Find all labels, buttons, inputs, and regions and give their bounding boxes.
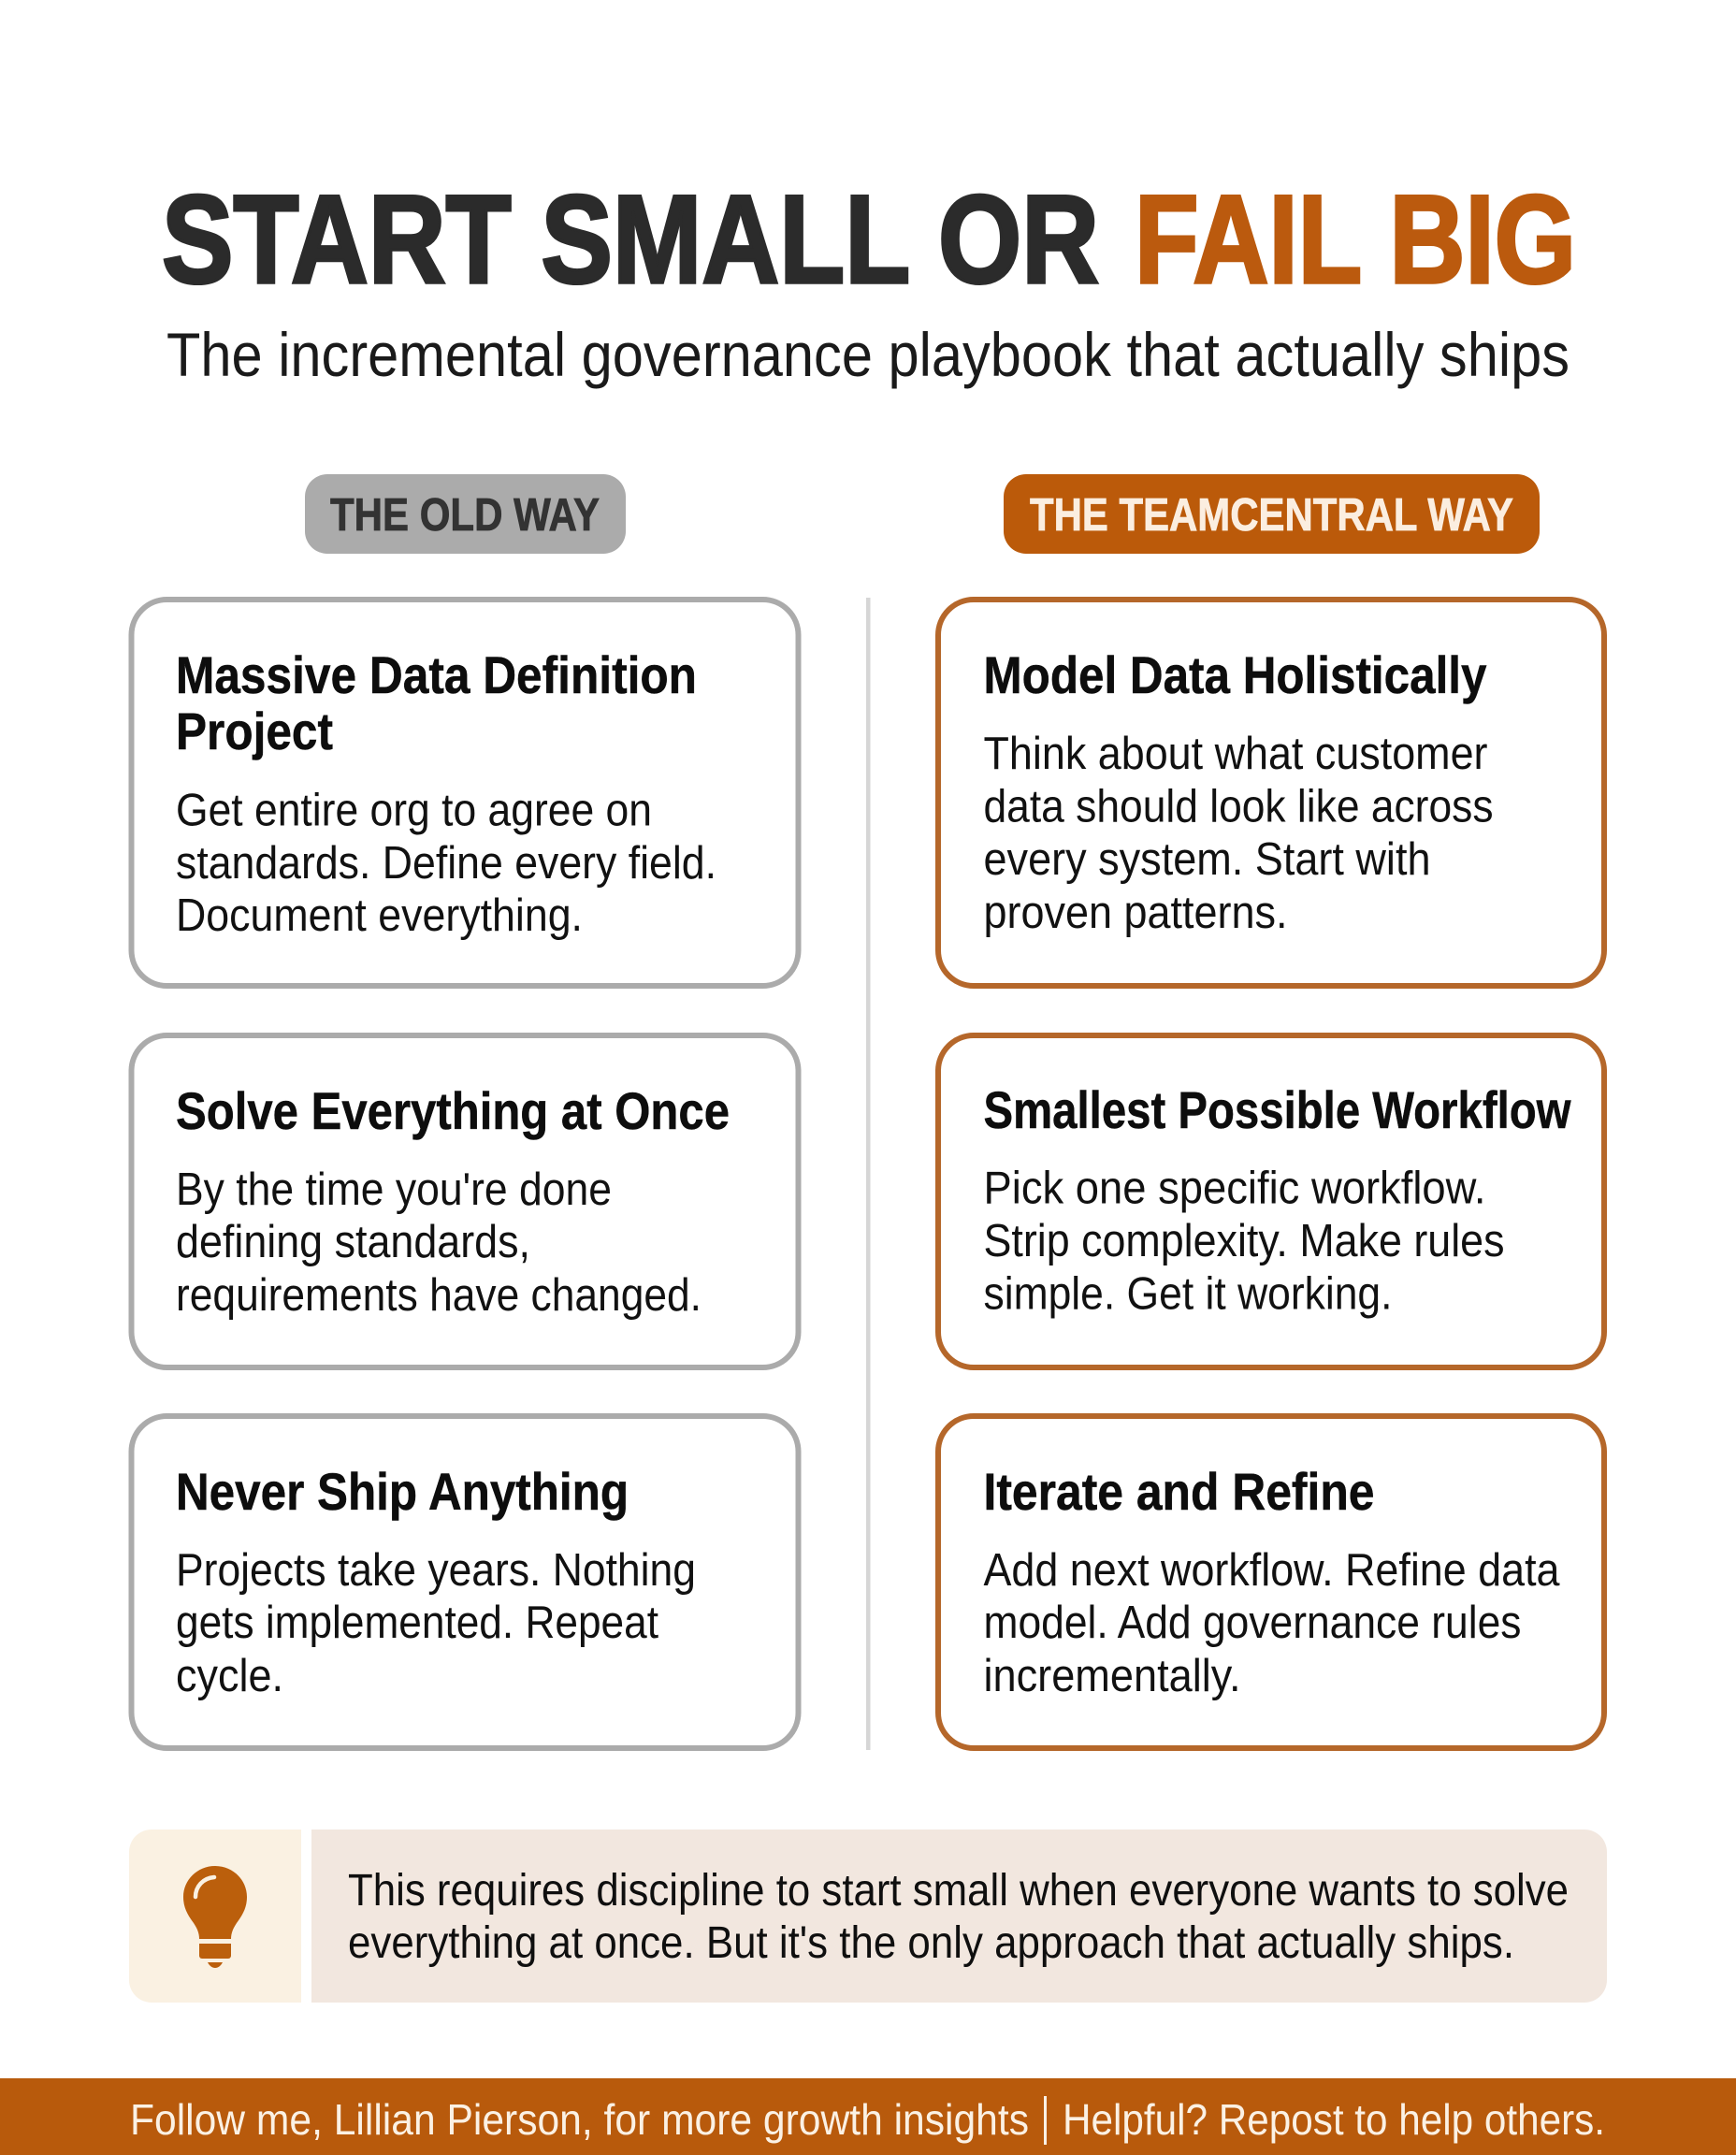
- card body: requirements have changed.: [176, 1270, 702, 1321]
- callout: [129, 1830, 1607, 2003]
- card heading: Massive Data Definition: [176, 645, 697, 704]
- callout text: This requires discipline to start small when everyone wants to solve: [348, 1866, 1569, 1916]
- card body: Get entire org to agree on: [176, 786, 652, 836]
- card body: cycle.: [176, 1651, 283, 1701]
- card heading: Never Ship Anything: [176, 1462, 629, 1521]
- footer banner: [0, 2078, 1736, 2155]
- card heading: Iterate and Refine: [984, 1462, 1375, 1521]
- card body: Document everything.: [176, 890, 583, 941]
- card body: [984, 729, 1493, 938]
- card body: every system. Start with: [984, 834, 1431, 885]
- callout text: [348, 1866, 1569, 1968]
- title: FAIL BIG: [1135, 170, 1576, 310]
- card heading: Project: [176, 701, 333, 760]
- card body: [984, 1545, 1560, 1701]
- card body: defining standards,: [176, 1217, 530, 1267]
- title: START SMALL OR: [162, 170, 1099, 310]
- subtitle: The incremental governance playbook that actually ships: [166, 320, 1570, 389]
- card body: incrementally.: [984, 1651, 1240, 1701]
- card body: Strip complexity. Make rules: [984, 1216, 1504, 1266]
- card body: By the time you're done: [176, 1164, 612, 1215]
- card body: [176, 1545, 696, 1701]
- card body: Add next workflow. Refine data: [984, 1545, 1560, 1596]
- card body: [176, 1164, 702, 1321]
- panel: never ship anything: [131, 1416, 799, 1748]
- card body: gets implemented. Repeat: [176, 1598, 658, 1648]
- badge: the old way: [305, 474, 626, 554]
- card body: Think about what customer: [984, 729, 1487, 779]
- card body: [984, 1164, 1504, 1319]
- icon: light bulb: [183, 1866, 247, 1968]
- card heading: Smallest Possible Workflow: [984, 1080, 1571, 1139]
- card body: proven patterns.: [984, 888, 1287, 938]
- panel: model data holistically: [938, 600, 1604, 986]
- badge: the teamcentral way: [1004, 474, 1540, 554]
- callout text: everything at once. But it's the only approach that actually ships.: [348, 1918, 1514, 1968]
- panel: smallest possible workflow: [938, 1035, 1604, 1367]
- icon tile: [129, 1830, 301, 2003]
- card body: data should look like across: [984, 782, 1493, 832]
- panel: massive data definition project: [131, 600, 799, 986]
- card heading: [176, 645, 697, 760]
- card body: [176, 786, 716, 941]
- panel: solve everything at once: [131, 1035, 799, 1367]
- badge: the teamcentral way: THE TEAMCENTRAL WAY: [1030, 490, 1513, 541]
- footer banner: Helpful? Repost to help others.: [1063, 2095, 1605, 2144]
- panel: iterate and refine: [938, 1416, 1604, 1748]
- card body: model. Add governance rules: [984, 1598, 1521, 1648]
- footer banner: Follow me, Lillian Pierson, for more growth insights: [130, 2095, 1029, 2144]
- badge: the old way: THE OLD WAY: [330, 490, 600, 541]
- card body: standards. Define every field.: [176, 838, 716, 889]
- card body: Pick one specific workflow.: [984, 1164, 1485, 1214]
- card heading: Model Data Holistically: [984, 645, 1487, 704]
- card body: Projects take years. Nothing: [176, 1545, 696, 1596]
- card heading: Solve Everything at Once: [176, 1081, 730, 1140]
- message panel: [311, 1830, 1607, 2003]
- card body: simple. Get it working.: [984, 1268, 1392, 1319]
